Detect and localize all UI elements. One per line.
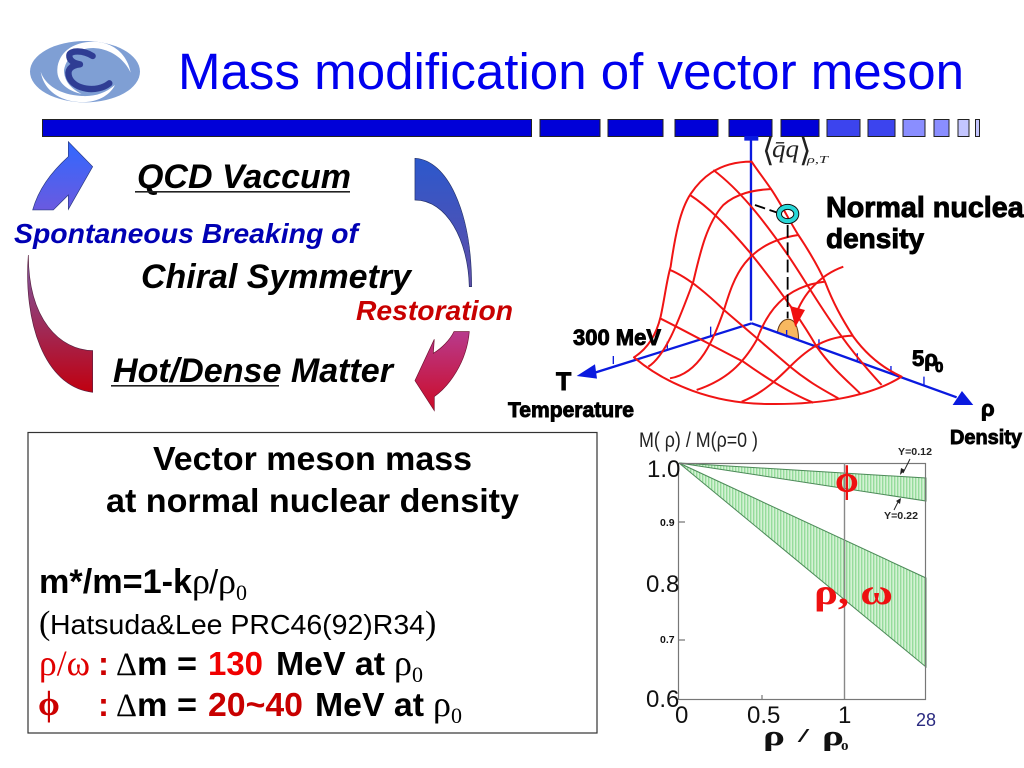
series label: rho omega: ρ, ω [814, 572, 893, 612]
result: rho omega: m = [137, 645, 197, 682]
axis label: condensate: ρ,T [806, 154, 829, 166]
result: phi: ϕ [38, 684, 60, 723]
marker: teal ring [779, 207, 796, 221]
label: Restoration: Restoration [356, 295, 513, 326]
citation: Hatsuda&Lee PRC46(92)R34 [50, 609, 425, 640]
heading: Hot/Dense Matter: Hot/Dense Matter [113, 352, 395, 390]
label: T Temperature: Temperature [508, 399, 634, 422]
label: 5 rho0: 5ρ [912, 346, 938, 371]
x axis title [763, 721, 848, 754]
red mesh [634, 162, 902, 404]
box heading [106, 441, 519, 520]
formula: 0 [236, 580, 247, 605]
x axis title: ρ [763, 721, 785, 752]
title: Mass modification of vector meson [178, 43, 964, 100]
annotation: Y=0.22: Y=0.22 [884, 511, 918, 522]
heading: QCD Vaccum: QCD Vaccum [137, 158, 351, 196]
x axis title: ρ [822, 721, 844, 752]
y tick labels [646, 456, 680, 713]
label: 5 rho0 [912, 346, 943, 376]
formula: m*/m=1-k [39, 563, 192, 601]
annotation: Y=0.12 [898, 447, 932, 475]
chart: mass ratio vs density [639, 429, 936, 754]
arrow: top left blue [33, 142, 93, 210]
label: Spontaneous Breaking of: Spontaneous Breaking of [14, 218, 361, 249]
result: rho omega: 0 [412, 662, 423, 687]
result: phi: 0 [451, 703, 462, 728]
x tick labels [675, 702, 851, 729]
panel: vector meson mass [28, 432, 597, 733]
result: rho omega: ρ/ω [39, 643, 90, 683]
dashed leader lines [755, 205, 788, 318]
result: phi: Δ [116, 688, 137, 724]
result: rho omega [39, 643, 423, 687]
axis label: condensate [762, 132, 829, 168]
y tick labels: 0.6 [646, 686, 679, 713]
formula [39, 561, 247, 605]
label: Normal nuclear density [826, 192, 1024, 254]
marker: orange nuclear density spot [777, 319, 799, 339]
label: T Temperature: T [556, 368, 571, 396]
formula: ρ [192, 561, 210, 601]
axis label: condensate: q̄q [772, 136, 799, 163]
label: rho Density: Density [950, 427, 1023, 449]
y tick labels: 0.7 [660, 634, 675, 646]
result: rho omega: 130 [208, 645, 263, 682]
label: T Temperature [508, 368, 634, 422]
plot frame [678, 463, 926, 700]
result: phi: : [98, 686, 109, 723]
red pointer arrowhead [790, 306, 805, 327]
header segmented bar [42, 120, 980, 136]
result: rho omega: : [98, 645, 109, 682]
page number: 28 [916, 710, 936, 730]
label: rho Density [950, 396, 1023, 449]
x axis title: / [796, 725, 810, 747]
result: phi [38, 684, 462, 728]
annotation: Y=0.12: Y=0.12 [898, 447, 932, 458]
arrow: bottom right red [415, 332, 469, 411]
label: rho Density: ρ [981, 396, 995, 421]
y axis title: M( ρ) / M(ρ=0 ) [639, 429, 758, 452]
result: rho omega: ρ [394, 643, 412, 683]
arrow: top right blue [415, 158, 472, 287]
y tick labels: 1.0 [647, 456, 680, 483]
citation: ( [39, 605, 50, 642]
result: rho omega: Δ [116, 647, 137, 683]
blue axes [595, 138, 957, 397]
label: Chiral Symmetry: Chiral Symmetry [141, 258, 413, 296]
cycle diagram: chiral symmetry [14, 142, 513, 411]
axis arrowheads [577, 136, 973, 405]
axis label: condensate: ⟨ [762, 132, 774, 168]
formula: ρ [218, 561, 236, 601]
arrow: bottom left red [28, 255, 93, 392]
x tick labels: 1 [838, 702, 851, 729]
3D chiral condensate surface plot [508, 132, 1024, 449]
logo [30, 41, 140, 102]
result: phi: 20~40 [208, 686, 303, 723]
result: rho omega: MeV at [276, 645, 385, 682]
label: 300 MeV: 300 MeV [573, 325, 661, 350]
series label: phi: ϕ [835, 459, 859, 501]
label: Normal nuclear density: density [826, 223, 924, 254]
x tick labels: 0 [675, 702, 688, 729]
result: phi: ρ [433, 684, 451, 724]
x tick labels: 0.5 [747, 702, 780, 729]
formula: / [209, 563, 219, 600]
box heading: at normal nuclear density [106, 483, 519, 520]
y tick labels: 0.8 [646, 571, 679, 598]
axis label: condensate: ⟩ [799, 132, 811, 168]
box heading: Vector meson mass [153, 441, 472, 478]
y tick labels: 0.9 [660, 517, 675, 529]
x axis title: o [841, 738, 848, 754]
band: rho omega [679, 463, 926, 667]
annotation: Y=0.22 [884, 498, 918, 522]
result: phi: MeV at [315, 686, 424, 723]
result: phi: m = [137, 686, 197, 723]
band: phi [679, 463, 926, 501]
label: 5 rho0: 0 [935, 359, 943, 376]
citation: ) [425, 605, 436, 642]
